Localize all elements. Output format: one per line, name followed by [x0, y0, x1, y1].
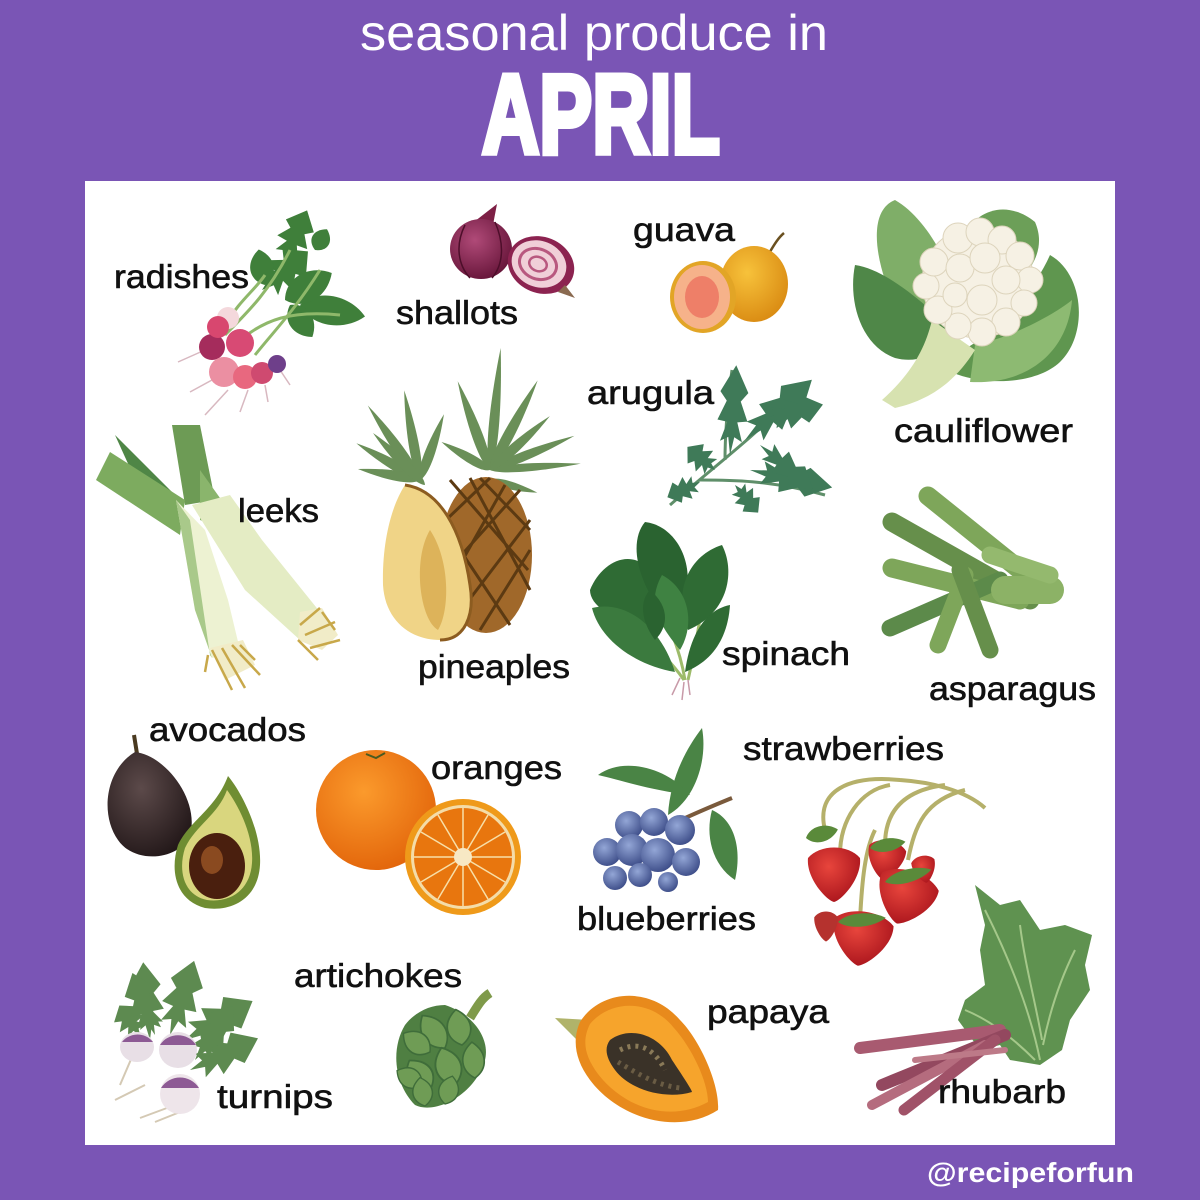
label: spinach: spinach	[722, 635, 850, 672]
icon: artichoke	[392, 993, 490, 1108]
icon: pineapple	[354, 348, 581, 640]
title: APRIL: APRIL	[482, 52, 720, 177]
icon: strawberries	[804, 779, 985, 970]
label: avocados: avocados	[149, 711, 306, 748]
label: oranges: oranges	[431, 749, 562, 786]
label: turnips: turnips	[217, 1078, 333, 1115]
label: radishes: radishes	[114, 258, 249, 295]
icon: asparagus	[890, 496, 1050, 650]
icon: oranges	[316, 750, 521, 915]
icon: avocados	[108, 735, 260, 909]
label: guava: guava	[633, 211, 736, 248]
label: strawberries: strawberries	[743, 730, 944, 767]
icon: arugula	[662, 364, 835, 520]
label: blueberries: blueberries	[577, 900, 756, 937]
label: rhubarb: rhubarb	[938, 1073, 1066, 1110]
handle: @recipeforfun: @recipeforfun	[927, 1157, 1134, 1188]
icon: shallots	[450, 204, 583, 304]
label: shallots: shallots	[396, 294, 518, 331]
label: asparagus: asparagus	[929, 670, 1096, 707]
icon: papaya	[555, 996, 718, 1122]
icon: cauliflower	[853, 200, 1079, 408]
label: pineaples: pineaples	[418, 648, 570, 685]
label: artichokes: artichokes	[294, 957, 462, 994]
icon: guava	[670, 233, 788, 333]
icon: rhubarb	[860, 885, 1092, 1110]
panel: produce board	[85, 181, 1115, 1145]
icon: spinach	[590, 522, 730, 700]
label: leeks: leeks	[238, 492, 319, 529]
icon: leeks	[96, 425, 340, 690]
label: cauliflower: cauliflower	[894, 412, 1073, 449]
label: papaya: papaya	[707, 993, 830, 1030]
icon: blueberries	[593, 728, 738, 892]
icon: radishes	[178, 203, 368, 415]
label: arugula: arugula	[587, 374, 715, 411]
icon: turnips	[107, 955, 266, 1122]
title: seasonal produce in: seasonal produce in	[360, 5, 828, 61]
